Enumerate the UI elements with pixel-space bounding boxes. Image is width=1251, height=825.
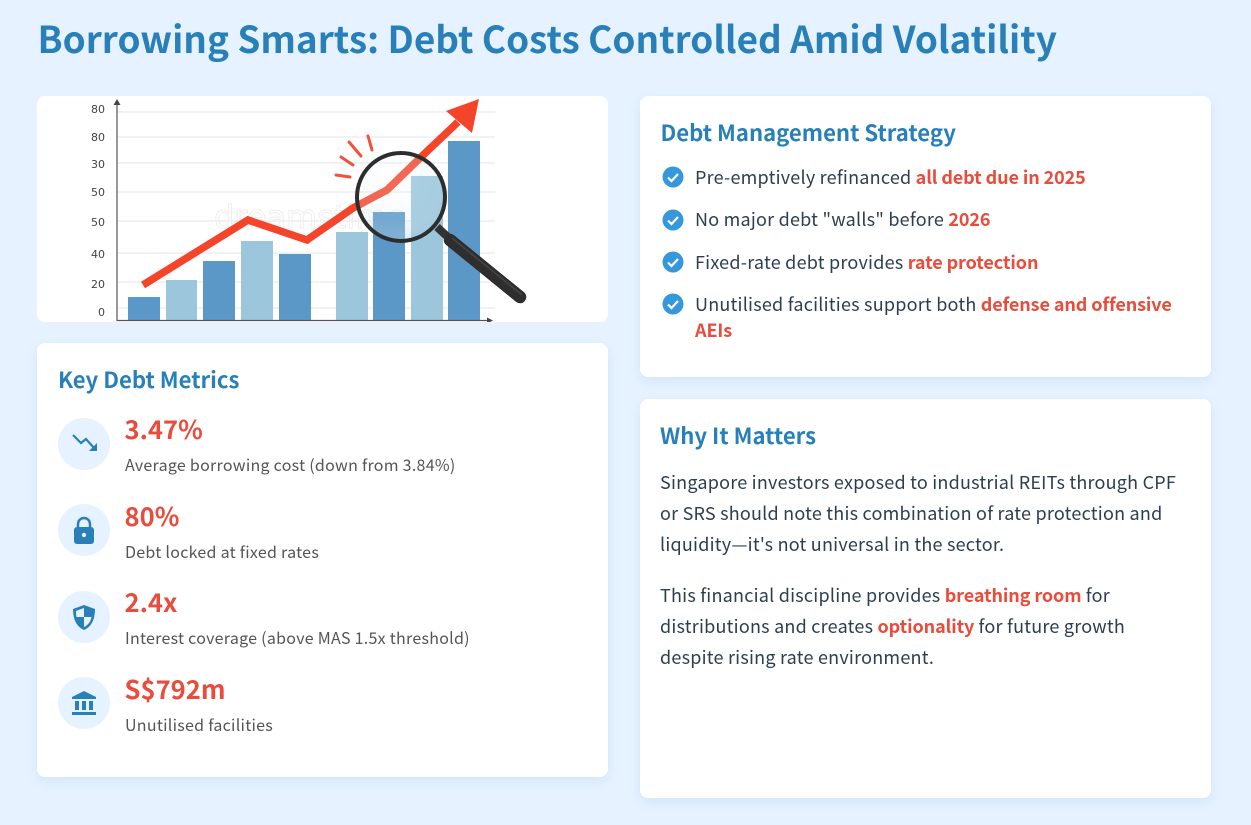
- metric description: Interest coverage (above MAS 1.5x threshold): [125, 625, 470, 649]
- icon: trending down: [58, 418, 110, 470]
- title: Borrowing Smarts: Debt Costs Controlled Amid Volatility: [38, 10, 1057, 64]
- metric description: Debt locked at fixed rates: [125, 539, 319, 563]
- check icon: [662, 294, 684, 314]
- metric: 80%: 80%: [124, 497, 179, 534]
- heading: why it matters: Why It Matters: [660, 419, 816, 451]
- check icon: [662, 166, 684, 188]
- check icon: [662, 252, 684, 272]
- chart axis labels: [91, 103, 105, 319]
- panel: why it matters: [640, 399, 1211, 798]
- metric: 2.4x: 2.4x: [124, 583, 177, 620]
- chart axis labels: 30: [91, 158, 105, 171]
- chart axis labels: 20: [91, 278, 105, 291]
- chart axis labels: 50: [91, 216, 105, 229]
- paragraph: investors: liquidity—it's not universal in the sector.: [660, 531, 1004, 557]
- metric description: Average borrowing cost (down from 3.84%): [125, 452, 456, 476]
- strategy point: No major debt "walls" before 2026: [695, 206, 990, 232]
- panel: chart image: [37, 96, 608, 322]
- metric: S$792m: S$792m: [124, 670, 226, 707]
- panel: key debt metrics: [37, 343, 608, 777]
- magnifying glass: [357, 153, 522, 297]
- strategy point: AEIs: [695, 317, 732, 343]
- watermark: dreamstime: [214, 198, 406, 236]
- icon: shield: [58, 591, 110, 643]
- heading: debt management strategy: Debt Management Strategy: [660, 116, 956, 148]
- heading: key debt metrics: Key Debt Metrics: [58, 363, 239, 395]
- icon: bank: [58, 677, 110, 729]
- chart axis labels: 40: [91, 248, 105, 261]
- strategy point: Unutilised facilities support both defense and offensive: [695, 291, 1172, 317]
- chart axis labels: 80: [91, 131, 105, 144]
- strategy point: [695, 291, 1172, 343]
- paragraph: investors: or SRS should note this combination of rate protection and: [660, 500, 1162, 526]
- bars: [128, 141, 480, 320]
- spark marks: [336, 136, 372, 177]
- red trend arrow: [143, 99, 479, 285]
- chart axis labels: 0: [98, 306, 105, 319]
- strategy point: Pre-emptively refinanced all debt due in 2025: [695, 164, 1086, 190]
- metric: 3.47%: 3.47%: [124, 410, 203, 447]
- paragraph: investors: Singapore investors exposed to industrial REITs through CPF: [660, 469, 1176, 495]
- paragraph: discipline: [660, 582, 1125, 670]
- paragraph: discipline: distributions and creates optionality for future growth: [660, 613, 1125, 639]
- paragraph: investors: [660, 469, 1176, 557]
- panel: debt management strategy: [640, 96, 1211, 377]
- metric description: Unutilised facilities: [125, 712, 273, 736]
- check icon: [662, 210, 684, 230]
- chart axis labels: 50: [91, 186, 105, 199]
- axes: [114, 99, 493, 324]
- paragraph: discipline: This financial discipline provides breathing room for: [660, 582, 1110, 608]
- strategy point: Fixed-rate debt provides rate protection: [695, 249, 1038, 275]
- chart axis labels: 80: [91, 103, 105, 116]
- paragraph: discipline: despite rising rate environment.: [660, 644, 934, 670]
- icon: lock: [58, 504, 110, 556]
